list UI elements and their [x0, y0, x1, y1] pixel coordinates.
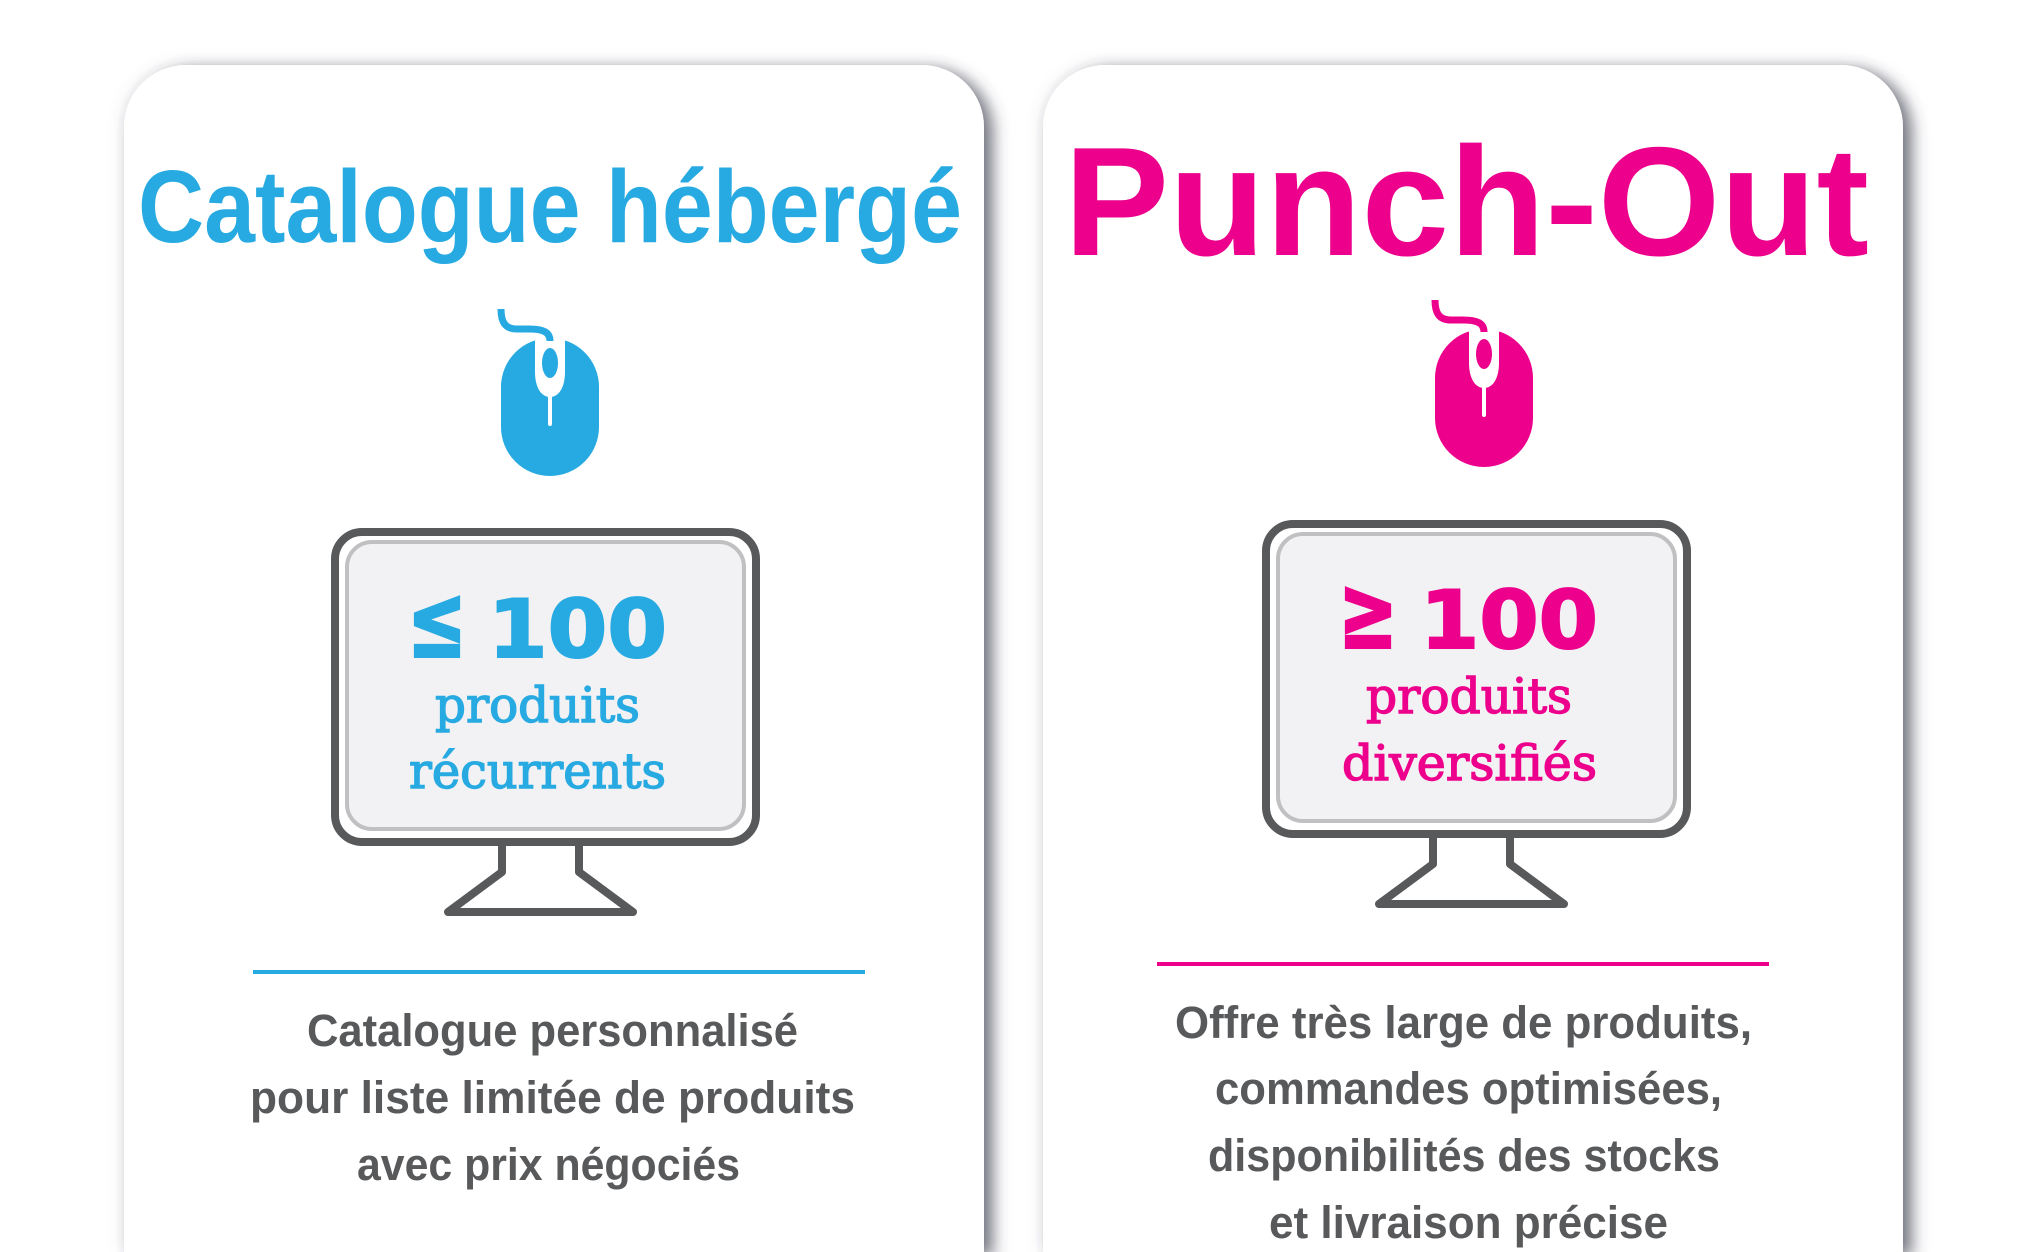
description text	[1175, 997, 1752, 1248]
description text: et livraison précise	[1269, 1197, 1668, 1248]
icon: monitor	[335, 532, 756, 912]
stat: at least 100: 100	[1420, 574, 1598, 667]
description text: Offre très large de produits,	[1175, 997, 1752, 1048]
stat: at most 100: 100	[488, 583, 667, 676]
icon: monitor	[1266, 524, 1687, 904]
icon: computer mouse	[1435, 300, 1533, 467]
stat: at most 100	[407, 560, 667, 682]
label: produits diversifiés: produits	[1366, 668, 1572, 725]
description text: Catalogue personnalisé	[307, 1005, 798, 1056]
stat: at most 100: ≤	[407, 560, 467, 682]
stat: at least 100	[1338, 551, 1598, 673]
heading: Punch-Out: Punch-Out	[1064, 115, 1869, 288]
description text: disponibilités des stocks	[1208, 1130, 1720, 1181]
label: produits récurrents: produits	[435, 677, 640, 734]
panel card background	[1043, 65, 1903, 1252]
divider line	[1157, 962, 1769, 966]
stat: at least 100: ≥	[1338, 551, 1398, 673]
description text: pour liste limitée de produits	[250, 1072, 855, 1123]
label: produits récurrents: récurrents	[409, 743, 666, 800]
label: produits récurrents	[409, 677, 666, 800]
panel card background	[124, 65, 984, 1252]
panel: Punch-Out	[1043, 65, 1903, 1252]
label: produits diversifiés	[1342, 668, 1597, 792]
label: produits diversifiés: diversifiés	[1342, 735, 1597, 792]
description text: commandes optimisées,	[1215, 1063, 1722, 1114]
description text: avec prix négociés	[357, 1139, 740, 1190]
divider line	[253, 970, 865, 974]
panel: Catalogue hébergé	[124, 65, 984, 1252]
icon: computer mouse	[501, 309, 599, 476]
description text	[250, 1005, 855, 1190]
heading: Catalogue hébergé: Catalogue hébergé	[138, 149, 962, 264]
